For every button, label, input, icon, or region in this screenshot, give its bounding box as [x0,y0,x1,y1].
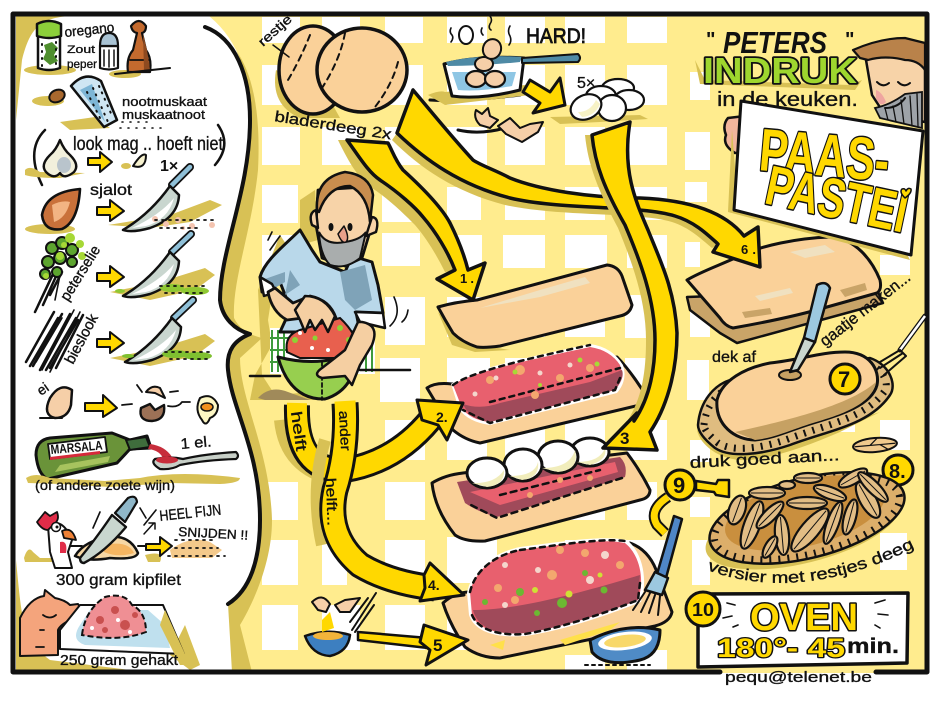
icon: fork [880,316,925,375]
bowl shadow [258,390,310,400]
table [250,370,410,376]
arrow 4 andere helft: ander [336,410,354,451]
right arm and hand [317,322,374,385]
arrow 2 helft: 2. [436,409,448,425]
label: sjalot: sjalot [90,182,133,199]
icon: chicken fillet with knife [70,497,156,563]
icon: minced meat on board [60,596,190,665]
icon: egg shells [458,108,543,142]
arrow 4 andere helft [317,401,464,601]
shirt [260,230,383,332]
label: 5x: 5× [577,75,595,92]
number badge 7: 7 [838,367,850,392]
face [316,187,372,266]
icon: knife chopping chives [110,300,215,366]
arrow 6 from puff pastry: 6. [741,242,756,257]
icon: cracked egg [122,385,218,424]
eggs on meat step 3 [432,438,650,541]
panel: oven instructions: OVEN [750,597,858,639]
hand in meat [295,296,335,332]
label: 250 gram gehakt: 250 gram gehakt [60,653,178,669]
portrait: Peter peeking over the sign [853,38,925,128]
left forearm [268,288,336,322]
icon: salt shaker [100,33,141,78]
ears [311,210,377,236]
credit: email: pequ@telenet.be [725,669,872,686]
arrow 1 from puff pastry: 1. [460,271,474,286]
icon: chopped chicken [168,540,225,558]
icon: peeled eggs [550,79,648,125]
label: look mag hoeft niet: 1× [160,158,178,175]
label: nootmuskaat / muskaatnoot [122,94,207,122]
title: Peters Indruk in de keuken: PETERS [723,25,827,60]
arrow: chives [97,332,124,353]
illustration: Peter mixing in a bowl [250,172,410,400]
icon: chives [26,310,83,372]
number badge 10 [686,592,720,626]
label: peper: peper [67,57,97,71]
puff pastry discs [273,26,407,118]
label: ei: ei [34,379,52,398]
arrow 4 andere helft: helft... [323,478,341,526]
shadow behind Peter [250,190,330,400]
icon: pastry brush [633,516,682,615]
icon: hand holding sign [724,116,750,153]
number badge 9 [665,470,695,500]
icon: knife chopping shallot [108,167,222,231]
arrow: fillet to chopped [146,537,172,556]
icon: shallot [25,189,80,234]
label: dek af: dek af [712,349,757,366]
arrow 6 from puff pastry [392,90,760,267]
title: Peters Indruk in de keuken: INDRUK [703,50,857,91]
arrow: parsley [97,266,124,287]
icon: bowl of beaten egg [585,628,660,665]
arrow: garlic to clove [88,152,112,172]
panel: oven instructions [698,593,908,667]
title: Peters Indruk in de keuken: " [706,29,715,51]
title: Peters Indruk in de keuken: " [845,29,854,51]
icon: oregano jar [24,21,76,75]
panel: Paas-Pastei sign: PAAS- [757,116,892,194]
icon: chicken [24,512,161,568]
arrow 1 from puff pastry [338,140,485,300]
number badge 10: 10 [692,600,714,620]
arrow: eggs to peeled [523,78,565,113]
facial features [328,223,352,242]
decorated pie step 8 [697,455,914,586]
plaid apron [270,328,375,374]
panel: Paas-Pastei sign [728,101,923,260]
label: 1 el.: 1 el. [180,433,212,453]
title: Peters Indruk in de keuken: in de keuken. [717,89,858,111]
icon: garlic clove [121,154,146,169]
icon: spoon [153,452,238,469]
label: peterselie: peterselie [57,243,104,304]
icon: pastry leaf cutout [852,436,898,454]
arrow 4 andere helft: 4. [428,577,440,593]
pastry covered step 6 [687,237,883,343]
arrow 2 helft: helft [287,410,310,453]
icon: bowl with cracked egg and whisk [305,593,376,656]
label: 300 gram kipfilet: 300 gram kipfilet [56,572,182,589]
icon: garlic [25,140,85,178]
label: oregano: oregano [64,19,115,40]
motion lines [268,232,408,326]
shirt shading [262,265,372,310]
label: nootmuskaat / muskaatnoot: nootmuskaat [122,94,207,109]
arrow 9 to pie and back [654,480,729,533]
meat layer step 2 [427,344,647,443]
panel: oven instructions: min. [847,635,899,658]
label: HARD!: HARD! [526,25,586,48]
wrapped meat step 4 [443,538,672,658]
panel: oven instructions: 180°- 45 [717,633,845,663]
hair [317,172,373,222]
label: look mag hoeft niet [34,125,224,185]
pie crimped step 7 [697,352,893,460]
label: gaatje maken: gaatje maken... [817,269,914,350]
number badge 7 [830,364,860,394]
label: bieslook: bieslook [62,311,102,367]
arrow 3 from eggs: 3 [620,429,629,448]
icon: parsley [35,233,86,312]
arrow: shallot [97,200,124,221]
title: Peters Indruk in de keuken [695,25,862,111]
icon: grater [60,77,165,130]
label: restje: restje [255,11,295,49]
label: of andere zoete wijn: (of andere zoete wijn) [35,477,175,493]
icon: knife chopping parsley [110,234,215,300]
label: zout: Zout [67,44,95,56]
arrow 5 from beaten egg: 5 [433,636,442,655]
panel: ingredients paper with brace edge [13,13,272,672]
rolled sleeves [260,277,385,328]
dough sheet step 1 [438,265,632,352]
label: versier met restjes deeg: versier met restjes deeg [710,540,914,584]
icon: marsala bottle [36,433,172,479]
bowl [278,352,357,399]
icon: pot with eggs [428,16,580,105]
label: bladerdeeg 2x: bladerdeeg 2x [273,108,393,144]
label: heel fijn snijden: SNIJDEN !! [178,524,249,543]
arrow 5 from beaten egg [358,625,468,665]
label: druk goed aan: druk goed aan... [689,447,840,472]
arrow: egg to cracked egg [85,395,117,417]
beard [319,232,366,266]
label: heel fijn snijden: HEEL FIJN [159,502,222,525]
label: nootmuskaat / muskaatnoot: muskaatnoot [122,107,205,122]
meat in bowl [287,318,357,358]
arrow 3 from eggs [585,122,677,450]
icon: pig [20,590,80,656]
label: look mag hoeft niet: look mag .. hoeft niet [73,134,224,155]
label: of andere zoete wijn [26,474,240,493]
number badge 9: 9 [673,473,685,498]
label: heel fijn snijden [144,502,249,543]
number badge 8 [883,455,913,485]
icon: nutmeg [32,87,67,106]
icon: egg [40,387,72,418]
icon: knife in pastry [790,283,830,372]
number badge 8: 8. [889,461,906,483]
icon: pepper mill [115,21,170,74]
icon: marsala bottle: MARSALA [50,437,104,457]
arrow 2 helft [280,400,463,480]
